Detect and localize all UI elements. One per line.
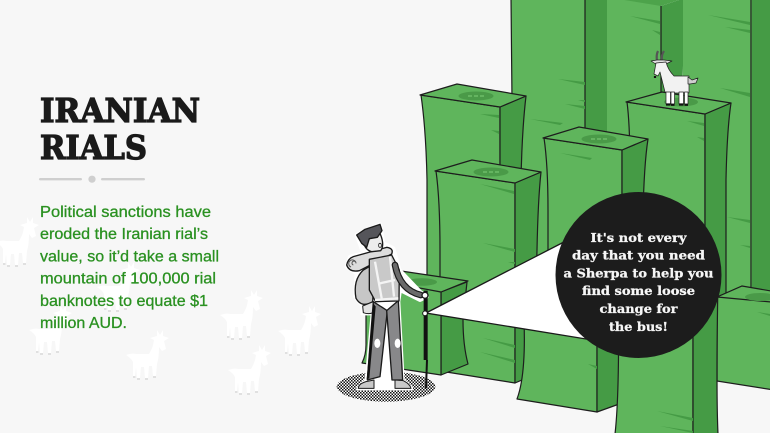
title: [40, 91, 200, 167]
bubble text: It's not every: [590, 230, 687, 245]
back stacks: [511, 0, 770, 345]
description text: [40, 204, 219, 332]
description text: mountain of 100,000 rial: [40, 270, 216, 288]
title: IRANIAN: [40, 91, 200, 130]
description text: million AUD.: [40, 315, 127, 332]
stack 4: [543, 127, 648, 300]
arm: [395, 265, 421, 295]
title: RIALS: [40, 128, 147, 167]
banknote shading marks: [480, 15, 770, 433]
boots: [358, 380, 374, 388]
stack 6 with goat: [626, 92, 731, 300]
stack 2: [435, 160, 541, 383]
bedroll: [347, 247, 392, 271]
bubble text: day that you need: [572, 248, 705, 262]
bubble text: the bus!: [609, 319, 668, 334]
white halo: [347, 224, 427, 388]
description text: eroded the Iranian rial’s: [40, 226, 208, 243]
head: [363, 233, 383, 252]
backpack: [355, 263, 375, 304]
description text: banknotes to equate $1: [40, 293, 208, 310]
description text: value, so it’d take a small: [40, 248, 219, 266]
bubble text: find some loose: [582, 283, 695, 298]
divider: [39, 176, 145, 183]
hiker: [337, 224, 435, 402]
torso: [369, 255, 399, 302]
bubble text: [564, 230, 714, 334]
bubble text: a Sherpa to help you: [564, 266, 714, 280]
trekking pole: [420, 291, 432, 360]
legs: [367, 302, 387, 380]
bubble text: change for: [600, 301, 678, 316]
speech pointer: [426, 243, 586, 339]
stack 3: [362, 265, 468, 375]
speech bubble: [556, 192, 722, 358]
stack 1: [420, 84, 526, 330]
stack 5: [517, 320, 622, 412]
stack 7: [615, 280, 718, 433]
stack 8: [717, 286, 770, 390]
background goats: [0, 217, 321, 394]
description text: Political sanctions have: [40, 204, 211, 221]
goat on stack: [651, 51, 698, 105]
ground shadow: [337, 372, 435, 402]
banknote mountain: [362, 0, 770, 433]
